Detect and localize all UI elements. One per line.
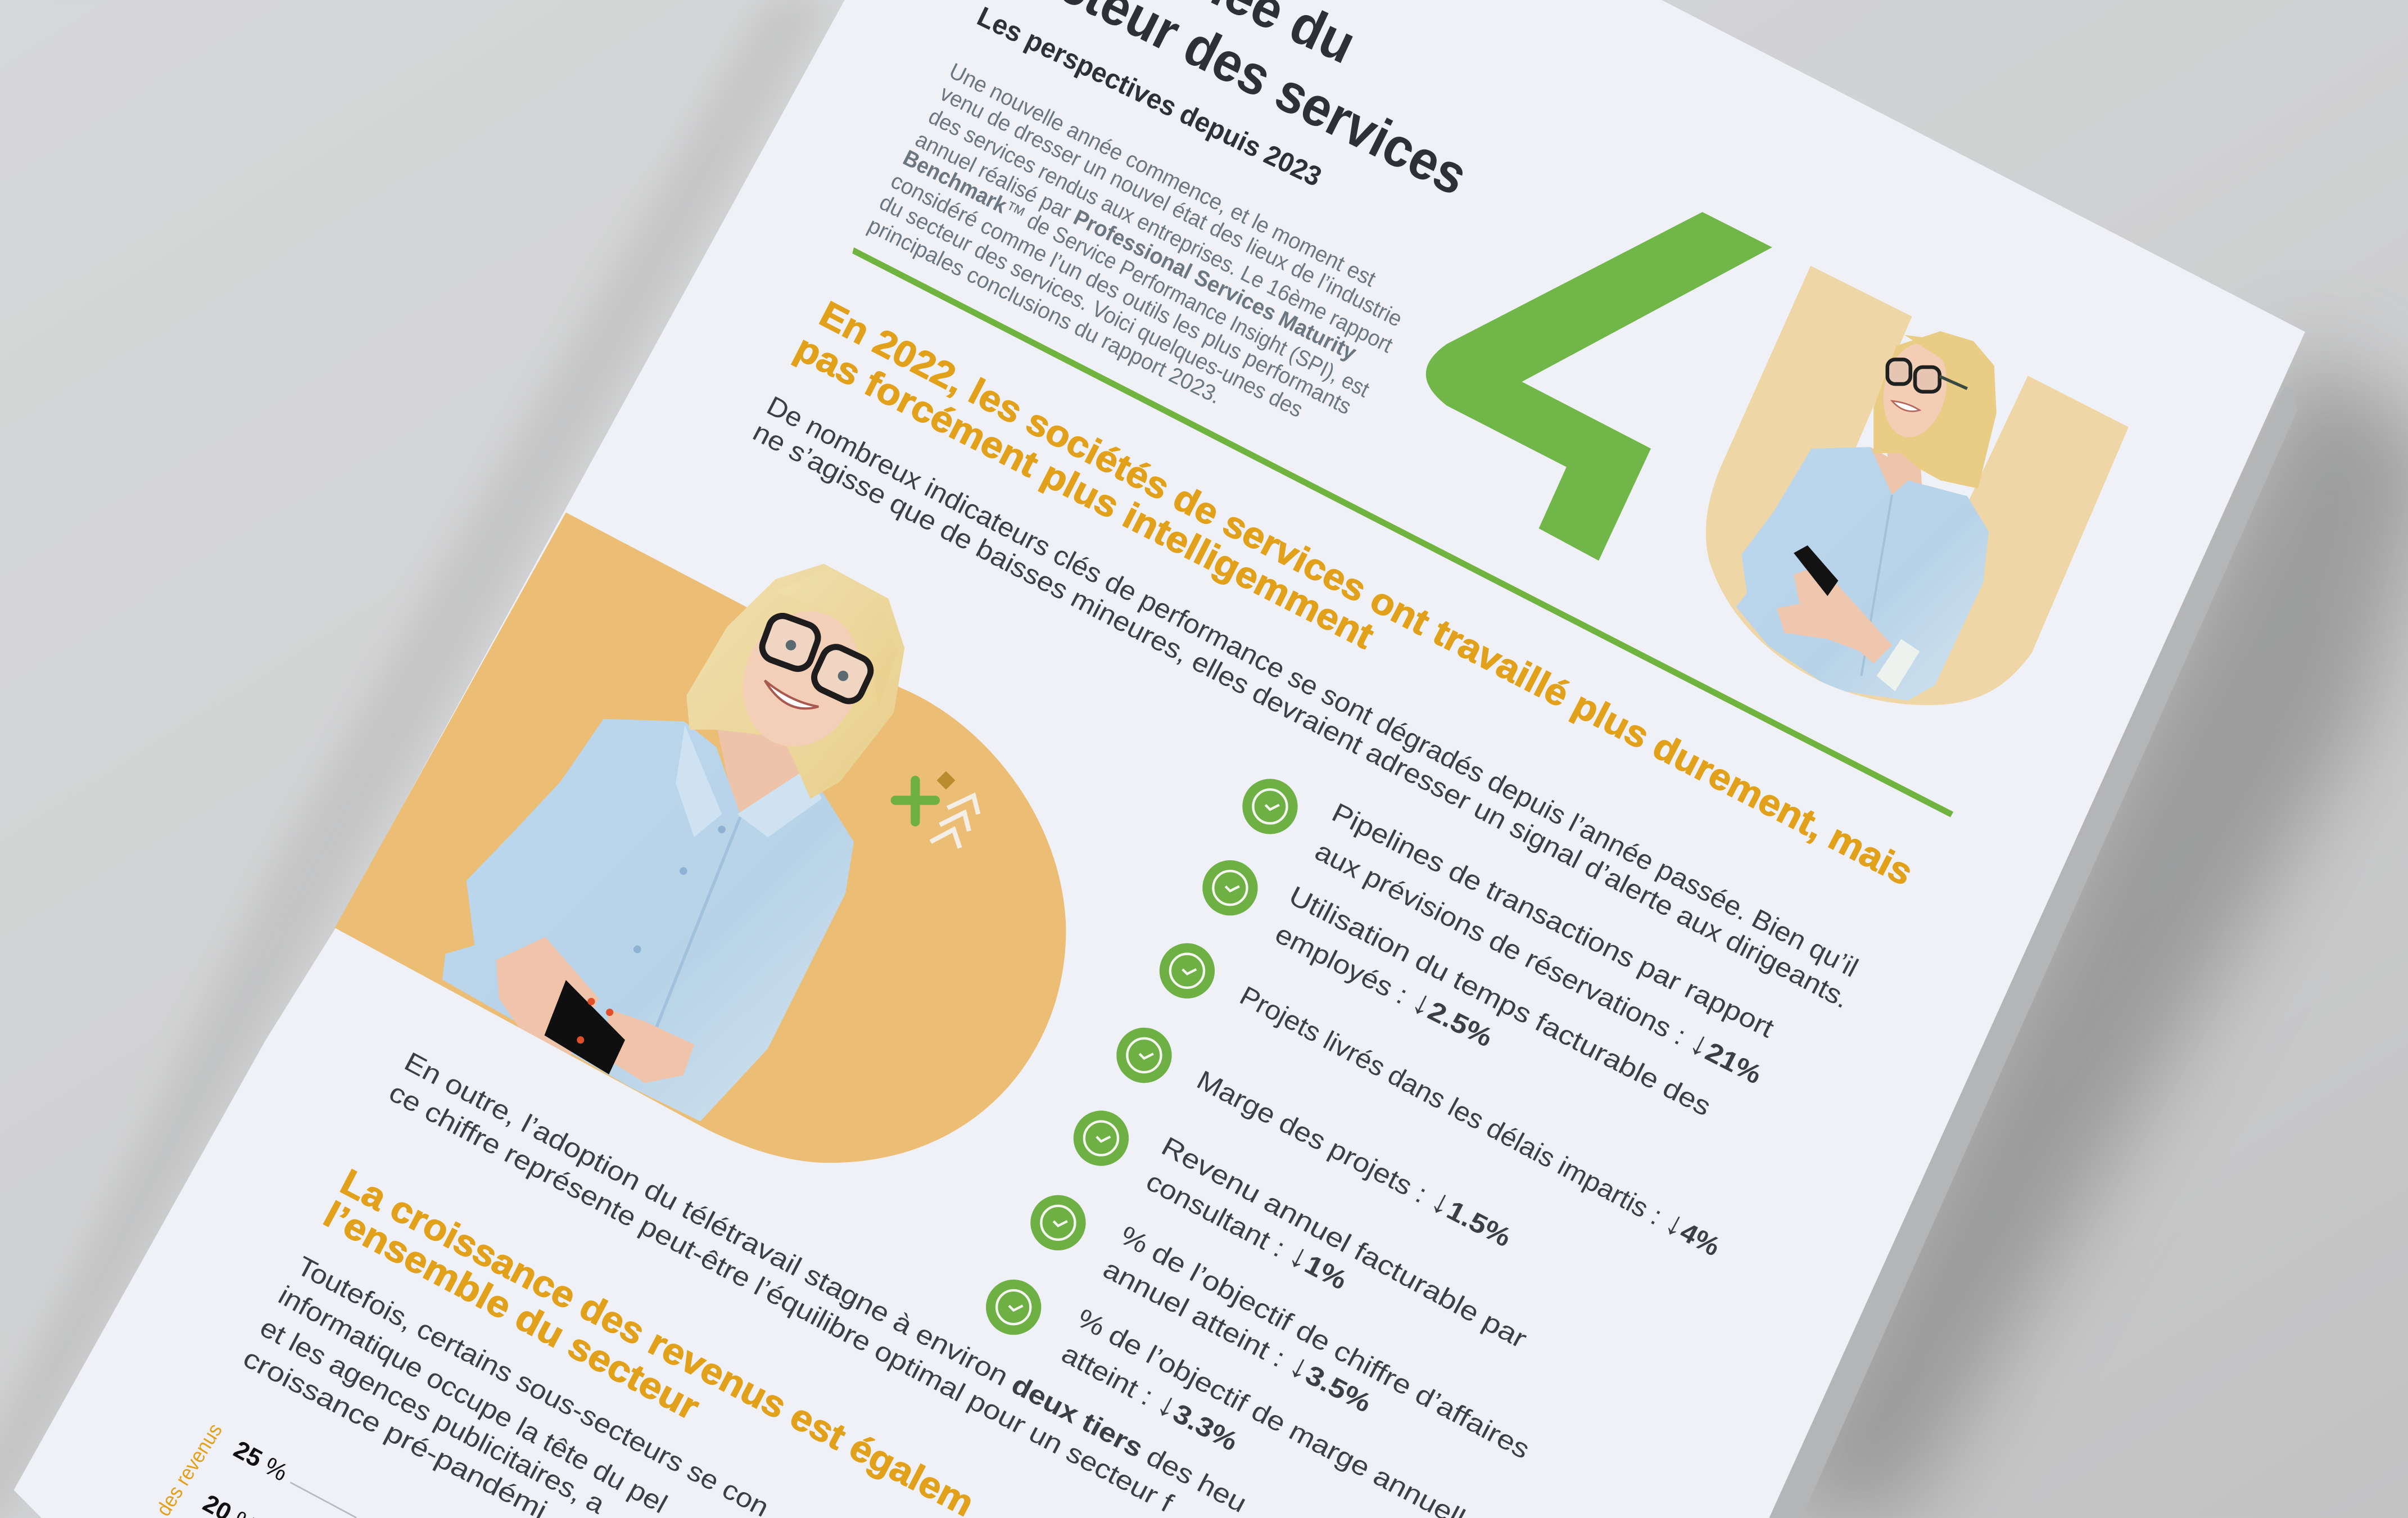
item 7	[986, 1280, 1484, 1518]
item 1	[1242, 779, 1778, 1091]
intro paragraph: principales conclusions du rapport 2023.	[864, 213, 1225, 409]
intro paragraph: venu de dresser un nouvel état des lieux de l’industrie	[936, 81, 1406, 332]
text: section 1 introduction: De nombreux indicateurs clés de performance se sont dégradés depuis l’année passée. Bien qu’il	[762, 391, 1863, 983]
text: section 2 paragraph: croissance pré-pandémi	[238, 1343, 551, 1518]
divider line	[852, 247, 1953, 817]
icon: peach U shape	[1706, 266, 2129, 705]
item 1: aux prévisions de réservations : ↓21%	[1310, 830, 1769, 1091]
item 5: consultant : ↓1%	[1140, 1160, 1355, 1296]
item 6: annuel atteint : ↓3.5%	[1098, 1248, 1379, 1420]
item 4	[1116, 1028, 1519, 1254]
intro paragraph: des services rendus aux entreprises. Le 16ème rapport	[925, 104, 1397, 358]
text: section 2 paragraph: Toutefois, certains sous-secteurs se con	[292, 1251, 773, 1518]
item 4: Marge des projets : ↓1.5%	[1192, 1059, 1519, 1254]
item 7: % de l’objectif de marge annuelle	[1072, 1303, 1484, 1518]
list: key performance indicators	[986, 779, 1778, 1518]
item 7: atteint : ↓3.3%	[1056, 1332, 1246, 1458]
item 2	[1202, 860, 1716, 1122]
item 3: Projets livrés dans les délais impartis : ↓4%	[1234, 975, 1728, 1263]
heading: section 2: l’ensemble du secteur	[317, 1194, 706, 1428]
icon: plus, star and chevrons	[895, 771, 978, 848]
axis title: des revenus	[152, 1419, 227, 1518]
item 2: employés : ↓2.5%	[1270, 913, 1500, 1054]
text: section 2 paragraph: informatique occupe la tête du pel	[273, 1280, 672, 1518]
heading: section 2: La croissance des revenus est égalem	[334, 1161, 981, 1518]
subtitle: Les perspectives depuis 2023	[972, 1, 1327, 192]
heading: section 1: En 2022, les sociétés de services ont travaillé plus durement, mais	[813, 293, 1920, 893]
item 6: % de l’objectif de chiffre d’affaires	[1115, 1221, 1535, 1465]
illustration: smiling woman with phone	[442, 564, 904, 1122]
panel: orange photo background	[335, 512, 1066, 1163]
intro paragraph: du secteur des services. Voici quelques-unes des	[876, 190, 1307, 422]
intro paragraph	[864, 58, 1406, 422]
intro paragraph: considéré comme l’un des outils les plus performants	[887, 168, 1355, 419]
icon: large green arrow	[1426, 212, 1772, 561]
item 5	[1074, 1110, 1532, 1354]
text: section 2 paragraph: et les agences publicitaires, a	[255, 1312, 610, 1518]
illustration: woman looking up with phone	[1736, 331, 1997, 701]
chart: revenue growth axis	[152, 1419, 356, 1518]
item 2: Utilisation du temps facturable des	[1284, 880, 1716, 1122]
text: remote work paragraph: En outre, l’adoption du télétravail stagne à environ deux tiers des heu	[400, 1047, 1251, 1518]
item 1: Pipelines de transactions par rapport	[1327, 798, 1778, 1043]
item 5: Revenu annuel facturable par	[1157, 1131, 1532, 1354]
heading: section 1: pas forcément plus intelligemment	[789, 327, 1380, 657]
intro paragraph: annuel réalisé par Professional Services Maturity	[912, 126, 1360, 365]
item 6	[1030, 1195, 1535, 1465]
intro paragraph: Benchmark™ de Service Performance Insight (SPI), est	[899, 145, 1373, 402]
axis label 25: 25 %	[229, 1435, 292, 1487]
intro paragraph: Une nouvelle année commence, et le moment est	[945, 58, 1379, 292]
text: remote work paragraph: ce chiffre représente peut-être l’équilibre optimal pour un secteur f	[384, 1077, 1178, 1518]
page stack edge	[1766, 386, 2297, 1518]
text: section 1 introduction: ne s’agisse que de baisses mineures, elles devraient adresser un signal d’alerte aux dirigeants.	[748, 417, 1854, 1014]
